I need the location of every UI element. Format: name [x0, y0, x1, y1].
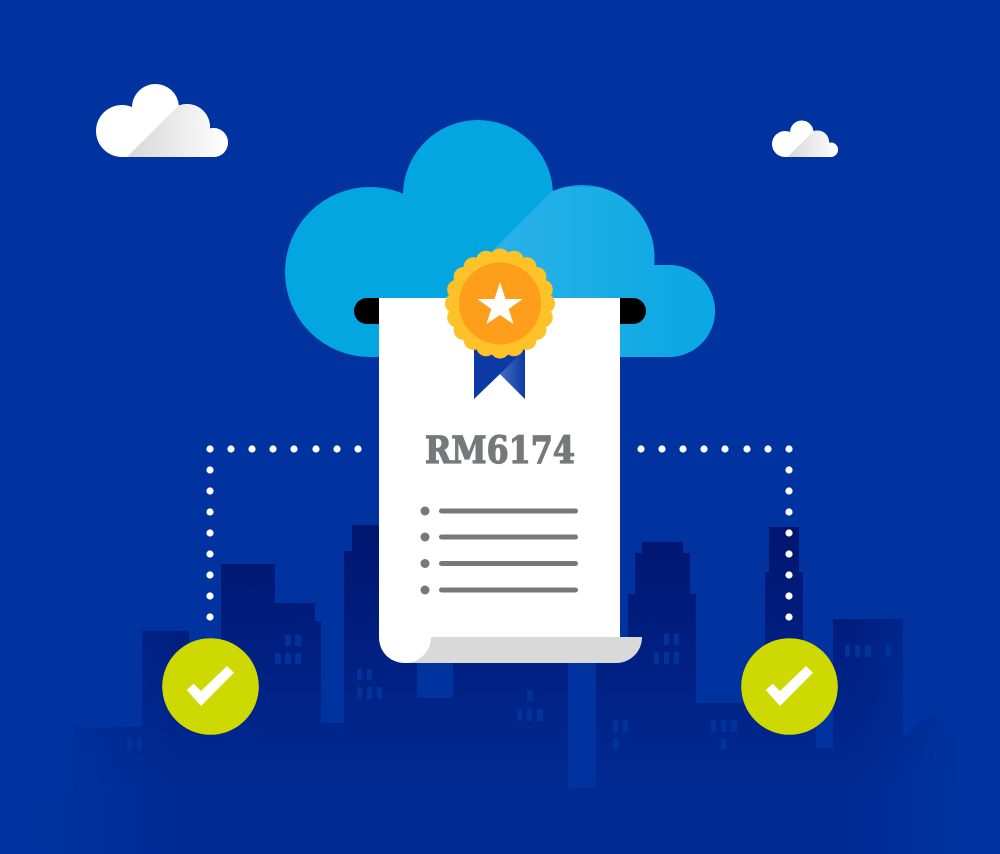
city skyline [40, 525, 958, 854]
paper sheet [379, 298, 620, 663]
dotted connector left [206, 445, 362, 621]
icon: check badge left [162, 638, 259, 735]
icon: rosette seal [445, 248, 555, 358]
document scroll [379, 298, 642, 663]
large blue cloud [280, 115, 720, 360]
document slot [354, 298, 646, 324]
scroll curl [405, 637, 642, 663]
bullet list [420, 506, 578, 594]
reference number: RM6174 [425, 428, 575, 472]
small cloud right [772, 120, 838, 157]
small cloud left [96, 84, 228, 157]
dotted connector right [637, 445, 793, 621]
icon: check badge right [741, 638, 838, 735]
icon: award ribbon [474, 345, 525, 399]
